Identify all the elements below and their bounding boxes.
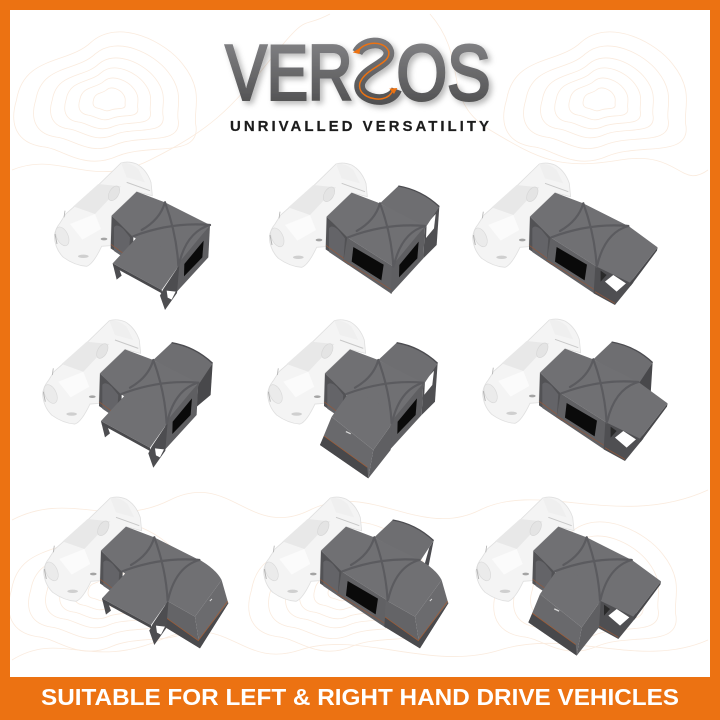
tagline: UNRIVALLED VERSATILITY <box>230 118 489 135</box>
configuration 3: van with side awning <box>471 163 658 305</box>
configuration 5: van with rear room and front tent <box>266 320 438 478</box>
configuration 4: van with rear room and front awning <box>41 320 213 468</box>
logo: VERSOS: VER <box>226 28 352 116</box>
logo S orange arrow line <box>353 43 397 99</box>
configuration 6: van with rear room and side awning <box>481 319 668 461</box>
logo: VERSOS: OS <box>396 28 490 116</box>
logo: VERSOS <box>226 28 490 116</box>
footer caption: SUITABLE FOR LEFT & RIGHT HAND DRIVE VEHICLES <box>41 684 679 710</box>
configuration 9: van with side awning and front tent <box>475 497 661 656</box>
configuration 1: van with awning front and window side <box>53 162 210 310</box>
configuration 7: van with front awning and side tent <box>42 497 228 648</box>
configuration 8: van with rear awning and side tent <box>262 497 448 648</box>
configuration 2: van with rear room and windows <box>268 163 439 294</box>
